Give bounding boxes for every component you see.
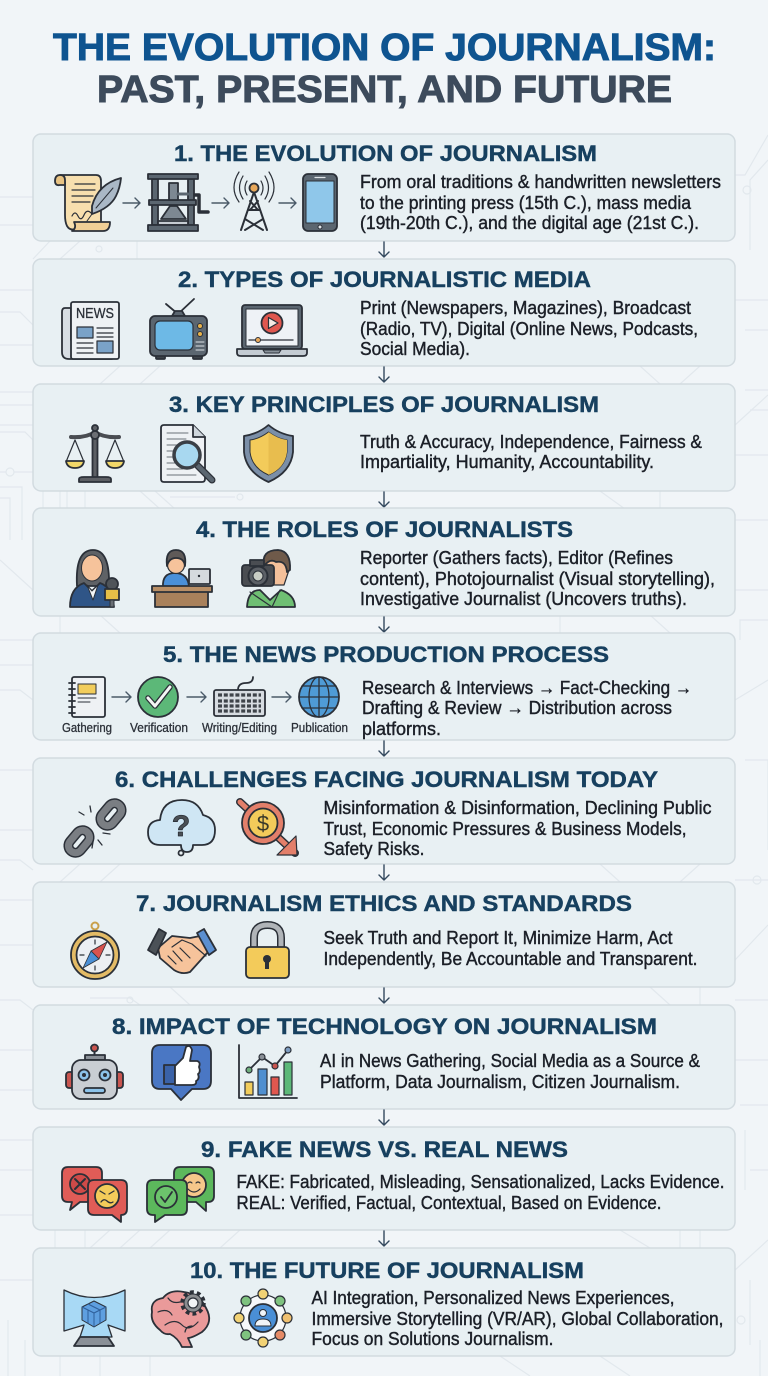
arrow <box>187 692 206 702</box>
description 4: Reporter (Gathers facts), Editor (Refines <box>360 547 673 568</box>
description 10: Focus on Solutions Journalism. <box>312 1328 554 1349</box>
description 1: (19th-20th C.), and the digital age (21st C.). <box>360 212 699 233</box>
title <box>53 27 716 111</box>
icon: shield <box>244 425 293 482</box>
icon: photojournalist <box>242 550 295 607</box>
arrow <box>123 198 140 208</box>
description 5: Research & Interviews → Fact-Checking → <box>362 677 692 698</box>
description 6: Trust, Economic Pressures & Business Models, <box>324 818 686 839</box>
icon: television <box>150 299 207 359</box>
description 3: Truth & Accuracy, Independence, Fairness & <box>360 431 703 452</box>
process labels <box>62 720 348 735</box>
icon: newspaper: NEWS <box>76 306 114 322</box>
description 7: Independently, Be Accountable and Transparent. <box>324 948 698 969</box>
description 10 <box>312 1287 724 1349</box>
description 2: Social Media). <box>360 338 470 359</box>
heading 2: 2. TYPES OF JOURNALISTIC MEDIA <box>178 267 591 292</box>
icon: robot <box>66 1044 123 1099</box>
process labels: Gathering <box>62 720 112 735</box>
description 7: Seek Truth and Report It, Minimize Harm, Act <box>324 927 672 948</box>
description 5: Drafting & Review → Distribution across <box>362 697 672 718</box>
icon: keyboard <box>214 677 265 716</box>
description 5: platforms. <box>362 718 441 739</box>
icon: broken chain <box>66 800 124 856</box>
title line 2: PAST, PRESENT, AND FUTURE <box>97 69 672 111</box>
description 10: Immersive Storytelling (VR/AR), Global Collaboration, <box>312 1308 724 1329</box>
heading 8: 8. IMPACT OF TECHNOLOGY ON JOURNALISM <box>112 1014 657 1039</box>
description 9: FAKE: Fabricated, Misleading, Sensationalized, Lacks Evidence. <box>236 1171 724 1192</box>
icon: editor at desk <box>152 550 212 607</box>
panel 3: key principles of journalism <box>33 384 735 491</box>
arrow: 1 to 2 <box>379 242 389 257</box>
description 1 <box>360 171 721 233</box>
heading 3: 3. KEY PRINCIPLES OF JOURNALISM <box>169 392 599 417</box>
description 4 <box>360 547 715 609</box>
title line 1: THE EVOLUTION OF JOURNALISM: <box>53 27 716 69</box>
description 5 <box>362 677 692 739</box>
icon: brain and gear <box>152 1291 209 1347</box>
panel 10: the future of journalism <box>33 1248 735 1356</box>
description 1: From oral traditions & handwritten newsletters <box>360 171 721 192</box>
icon: scales of justice <box>66 425 124 482</box>
panel 8: impact of technology on journalism <box>33 1005 735 1109</box>
icon: notebook <box>69 677 105 717</box>
icon: printing press <box>148 174 208 231</box>
icon: scroll and quill <box>55 175 121 231</box>
heading 5: 5. THE NEWS PRODUCTION PROCESS <box>163 642 609 667</box>
arrow: 9 to 10 <box>379 1231 389 1246</box>
heading 4: 4. THE ROLES OF JOURNALISTS <box>196 517 573 542</box>
panel 2: types of journalistic media <box>33 259 735 366</box>
heading 10: 10. THE FUTURE OF JOURNALISM <box>190 1258 584 1283</box>
icon: cloud with question mark: ? <box>172 810 190 843</box>
icon: globe <box>299 677 339 717</box>
icon: smartphone <box>303 174 337 231</box>
heading 9: 9. FAKE NEWS VS. REAL NEWS <box>201 1137 568 1162</box>
arrow: 4 to 5 <box>379 617 389 632</box>
icon: global network <box>234 1289 292 1347</box>
description 9 <box>236 1171 724 1213</box>
description 9: REAL: Verified, Factual, Contextual, Based on Evidence. <box>236 1192 662 1213</box>
icon: data chart <box>239 1045 297 1098</box>
arrow <box>272 692 291 702</box>
icon: real news bubbles <box>147 1167 214 1222</box>
arrow: 8 to 9 <box>379 1110 389 1125</box>
description 3: Impartiality, Humanity, Accountability. <box>360 451 654 472</box>
arrow: 6 to 7 <box>379 865 389 880</box>
description 6: Misinformation & Disinformation, Declining Public <box>324 797 712 818</box>
description 3 <box>360 431 703 472</box>
icon: padlock <box>246 925 289 978</box>
description 6 <box>324 797 712 859</box>
arrow: 3 to 4 <box>379 492 389 507</box>
arrow: 2 to 3 <box>379 367 389 382</box>
process labels: Verification <box>130 720 188 735</box>
process labels: Writing/Editing <box>202 720 277 735</box>
icon: newspaper <box>62 302 119 359</box>
arrow <box>212 198 229 208</box>
description 10: AI Integration, Personalized News Experiences, <box>312 1287 674 1308</box>
panel 7: journalism ethics and standards <box>33 882 735 987</box>
icon: document and magnifier <box>161 425 212 482</box>
description 8: Platform, Data Journalism, Citizen Journalism. <box>320 1071 680 1092</box>
icon: compass <box>71 922 119 979</box>
icon: radio tower <box>234 172 274 230</box>
description 8 <box>320 1050 701 1092</box>
arrow: 7 to 8 <box>379 988 389 1003</box>
panel 4: the roles of journalists <box>33 508 735 616</box>
panel 1: the evolution of journalism <box>33 134 735 241</box>
heading 1: 1. THE EVOLUTION OF JOURNALISM <box>174 141 597 166</box>
icon: verification check <box>138 677 178 717</box>
description 1: to the printing press (15th C.), mass media <box>360 192 692 213</box>
panel 6: challenges facing journalism today <box>33 758 735 864</box>
icon: handshake <box>148 929 216 973</box>
icon: hologram cube <box>64 1290 125 1346</box>
description 2: (Radio, TV), Digital (Online News, Podcasts, <box>360 318 698 339</box>
arrow: 5 to 6 <box>379 741 389 756</box>
description 6: Safety Risks. <box>324 838 424 859</box>
description 4: Investigative Journalist (Uncovers truths). <box>360 588 687 609</box>
icon: laptop with video <box>237 305 307 356</box>
icon: falling dollar: $ <box>257 811 269 836</box>
description 2: Print (Newspapers, Magazines), Broadcast <box>360 297 691 318</box>
arrow <box>112 692 131 702</box>
icon: fake news bubbles <box>62 1167 127 1222</box>
description 8: AI in News Gathering, Social Media as a Source & <box>320 1050 701 1071</box>
process labels: Publication <box>291 720 348 735</box>
heading 7: 7. JOURNALISM ETHICS AND STANDARDS <box>136 891 632 916</box>
description 7 <box>324 927 698 969</box>
icon: reporter with microphone <box>70 550 119 607</box>
arrow <box>279 198 296 208</box>
description 4: content), Photojournalist (Visual storytelling), <box>360 568 715 589</box>
icon: falling dollar <box>240 802 297 855</box>
icon: thumbs up bubble <box>152 1045 211 1100</box>
panel 9: fake news vs real news <box>33 1127 735 1230</box>
heading 6: 6. CHALLENGES FACING JOURNALISM TODAY <box>115 767 658 792</box>
icon: cloud with question mark <box>148 800 215 856</box>
panel 5: the news production process <box>33 633 735 740</box>
description 2 <box>360 297 698 359</box>
